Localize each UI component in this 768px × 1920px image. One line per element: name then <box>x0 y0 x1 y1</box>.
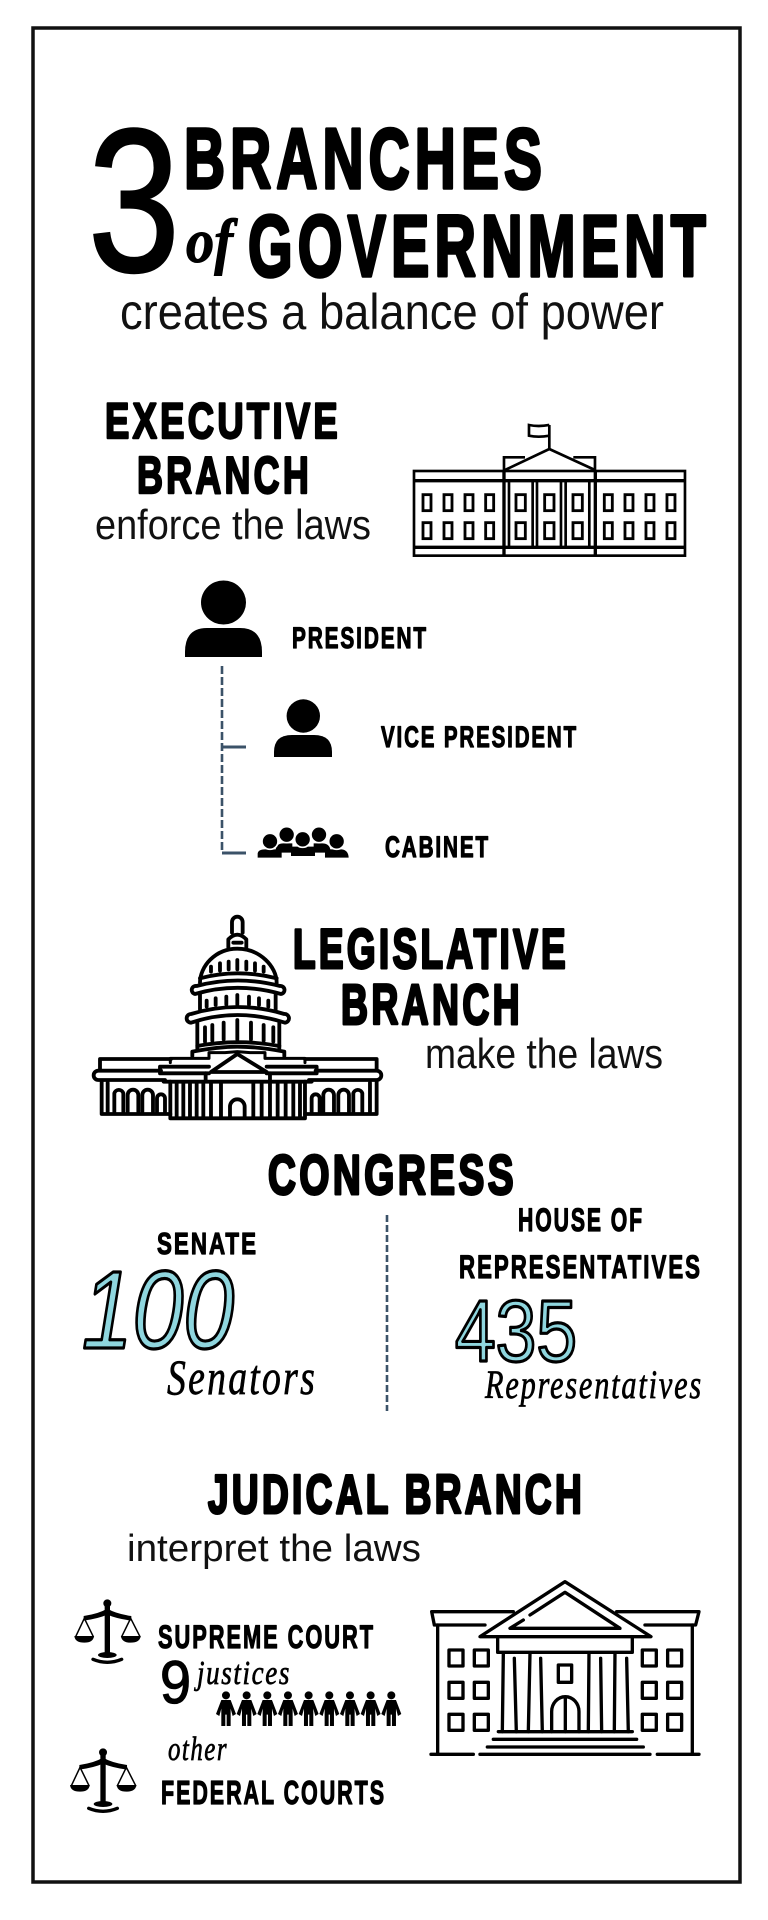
title: branches: BRANCHES <box>184 112 547 207</box>
panel: congress <box>82 1143 703 1411</box>
label: vice president: VICE PRESIDENT <box>381 721 578 754</box>
icon: scales of justice <box>74 1599 141 1662</box>
text: interpret the laws: interpret the laws <box>127 1528 421 1570</box>
text: senators: Senators <box>167 1349 317 1405</box>
icon: president <box>185 580 262 657</box>
subtitle: creates a balance of power <box>120 284 664 340</box>
icon: vice president <box>274 699 332 757</box>
number: 100: 100 <box>82 1249 234 1372</box>
icon: white house <box>414 425 685 556</box>
title block <box>88 87 711 340</box>
number: 9: 9 <box>160 1649 191 1716</box>
heading: congress: CONGRESS <box>268 1143 517 1206</box>
title numeral 3: 3 <box>88 87 180 315</box>
number: 435: 435 <box>455 1283 577 1380</box>
divider <box>386 1215 388 1411</box>
label: house of: HOUSE OF <box>518 1202 644 1238</box>
heading: legislative branch line 1: LEGISLATIVE <box>293 917 569 980</box>
heading: legislative branch line 2: BRANCH <box>341 973 523 1037</box>
text: representatives: Representatives <box>484 1362 703 1407</box>
label: supreme court: SUPREME COURT <box>158 1619 375 1655</box>
icon: capitol building <box>94 917 381 1118</box>
text: other: other <box>168 1731 228 1768</box>
panel: executive branch <box>95 393 685 864</box>
heading: executive branch line 2: BRANCH <box>137 447 312 505</box>
label: president: PRESIDENT <box>292 622 428 655</box>
icon: courthouse <box>431 1582 699 1754</box>
text: make the laws: make the laws <box>425 1030 663 1077</box>
label: cabinet: CABINET <box>385 831 490 864</box>
icon: scales of justice second <box>70 1748 136 1811</box>
heading: judical branch: JUDICAL BRANCH <box>208 1463 585 1525</box>
icons: nine justices <box>216 1691 401 1726</box>
label: senate: SENATE <box>157 1226 258 1261</box>
text: justices: justices <box>194 1655 291 1692</box>
panel: legislative branch <box>94 917 663 1118</box>
text: enforce the laws: enforce the laws <box>95 501 371 548</box>
heading: executive branch line 1: EXECUTIVE <box>105 393 341 449</box>
label: federal courts: FEDERAL COURTS <box>161 1774 386 1811</box>
org chart connector <box>222 666 246 853</box>
icon: cabinet <box>258 827 349 858</box>
panel: judicial branch <box>70 1463 699 1811</box>
title: of: of <box>186 208 238 276</box>
